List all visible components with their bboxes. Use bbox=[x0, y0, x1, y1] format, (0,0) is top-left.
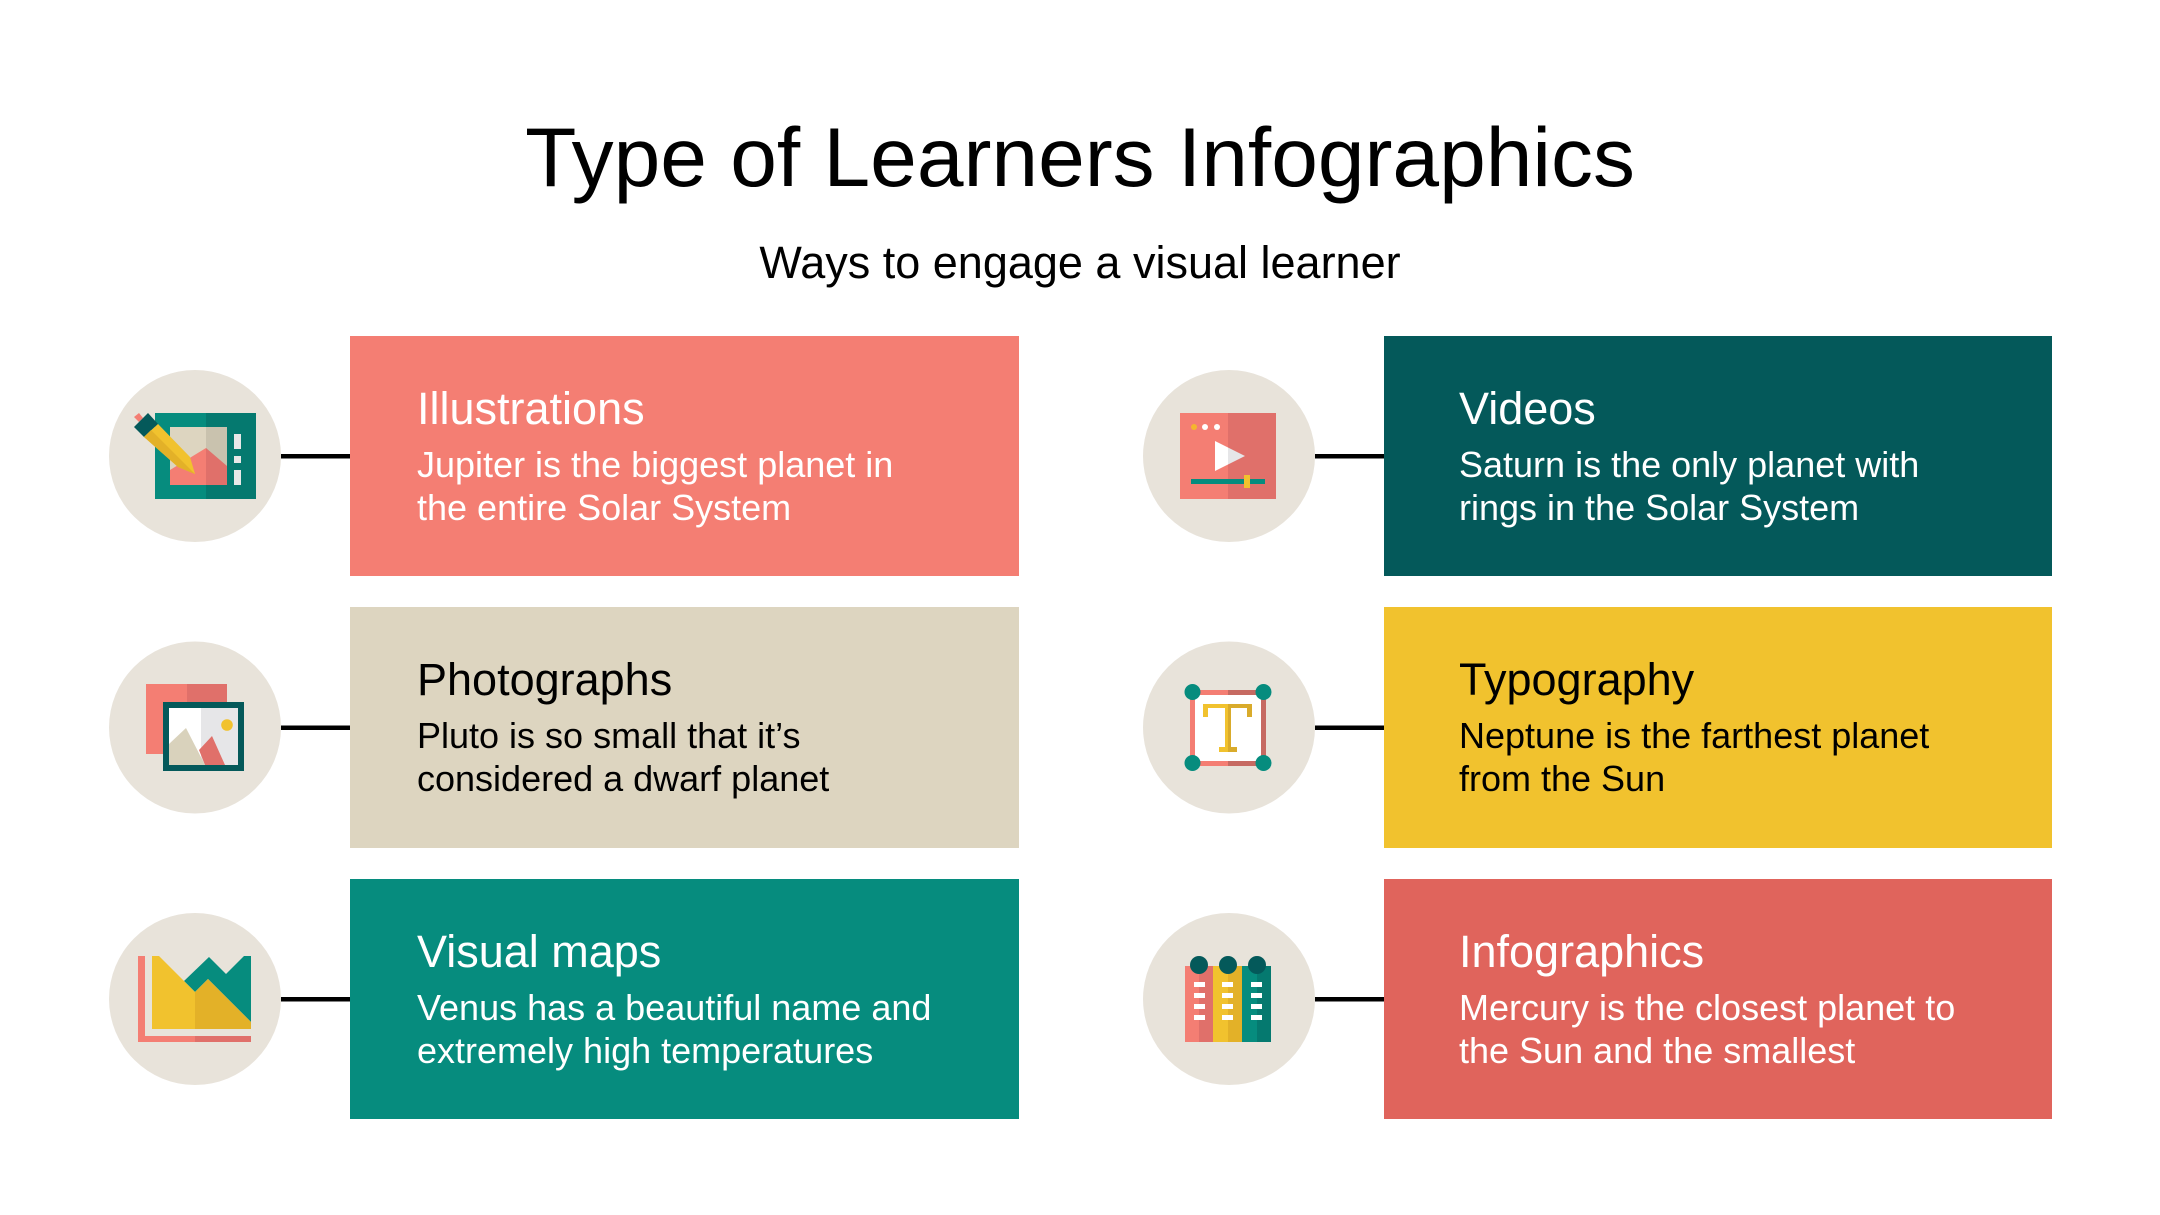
item: Illustrations bbox=[109, 336, 1019, 576]
panel text: Illustrations: the entire Solar System bbox=[417, 487, 791, 528]
item: Visual maps bbox=[109, 879, 1019, 1119]
connector line bbox=[281, 726, 350, 730]
panel text: Typography: from the Sun bbox=[1459, 758, 1665, 799]
panel text: Visual maps bbox=[417, 926, 931, 1071]
panel text: Visual maps: Venus has a beautiful name and bbox=[417, 987, 931, 1028]
icon: drawing tablet bbox=[109, 370, 281, 542]
panel text: Typography: Typography bbox=[1459, 654, 1695, 705]
item: Typography bbox=[1143, 607, 2052, 848]
panel text: Photographs bbox=[417, 654, 829, 799]
panel text: Videos: Saturn is the only planet with bbox=[1459, 444, 1919, 485]
panel text: Infographics: Infographics bbox=[1459, 926, 1704, 977]
icon: photographs bbox=[109, 642, 281, 814]
panel text: Illustrations bbox=[417, 383, 893, 528]
panel text: Photographs: Photographs bbox=[417, 654, 672, 705]
panel text: Illustrations: Illustrations bbox=[417, 383, 645, 434]
panel: Videos bbox=[1384, 336, 2052, 576]
item: Videos bbox=[1143, 336, 2052, 576]
item: Infographics bbox=[1143, 879, 2052, 1119]
connector line bbox=[281, 454, 350, 458]
panel text: Infographics: Mercury is the closest planet to bbox=[1459, 987, 1955, 1028]
title: Type of Learners Infographics bbox=[525, 110, 1635, 204]
panel: Visual maps bbox=[350, 879, 1019, 1119]
panel text: Visual maps: extremely high temperatures bbox=[417, 1030, 873, 1071]
panel: Photographs bbox=[350, 607, 1019, 848]
panel text: Videos: Videos bbox=[1459, 383, 1596, 434]
panel text: Typography: Neptune is the farthest planet bbox=[1459, 715, 1929, 756]
panel text: Typography bbox=[1459, 654, 1929, 799]
panel text: Infographics: the Sun and the smallest bbox=[1459, 1030, 1855, 1071]
connector line bbox=[1315, 454, 1384, 458]
icon: columns bbox=[1143, 913, 1315, 1085]
panel: Typography bbox=[1384, 607, 2052, 848]
panel: Infographics bbox=[1384, 879, 2052, 1119]
panel text: Photographs: Pluto is so small that it’s bbox=[417, 715, 800, 756]
panel: Illustrations bbox=[350, 336, 1019, 576]
connector line bbox=[1315, 726, 1384, 730]
subtitle: Ways to engage a visual learner bbox=[759, 237, 1401, 288]
connector line bbox=[281, 997, 350, 1002]
connector line bbox=[1315, 997, 1384, 1002]
panel text: Infographics bbox=[1459, 926, 1955, 1071]
panel text: Visual maps: Visual maps bbox=[417, 926, 661, 977]
icon: area chart bbox=[109, 913, 281, 1085]
panel text: Photographs: considered a dwarf planet bbox=[417, 758, 829, 799]
item: Photographs bbox=[109, 607, 1019, 848]
panel text: Illustrations: Jupiter is the biggest planet in bbox=[417, 444, 893, 485]
panel text: Videos bbox=[1459, 383, 1919, 528]
panel text: Videos: rings in the Solar System bbox=[1459, 487, 1859, 528]
icon: video player bbox=[1143, 370, 1315, 542]
icon: text frame bbox=[1143, 642, 1315, 814]
